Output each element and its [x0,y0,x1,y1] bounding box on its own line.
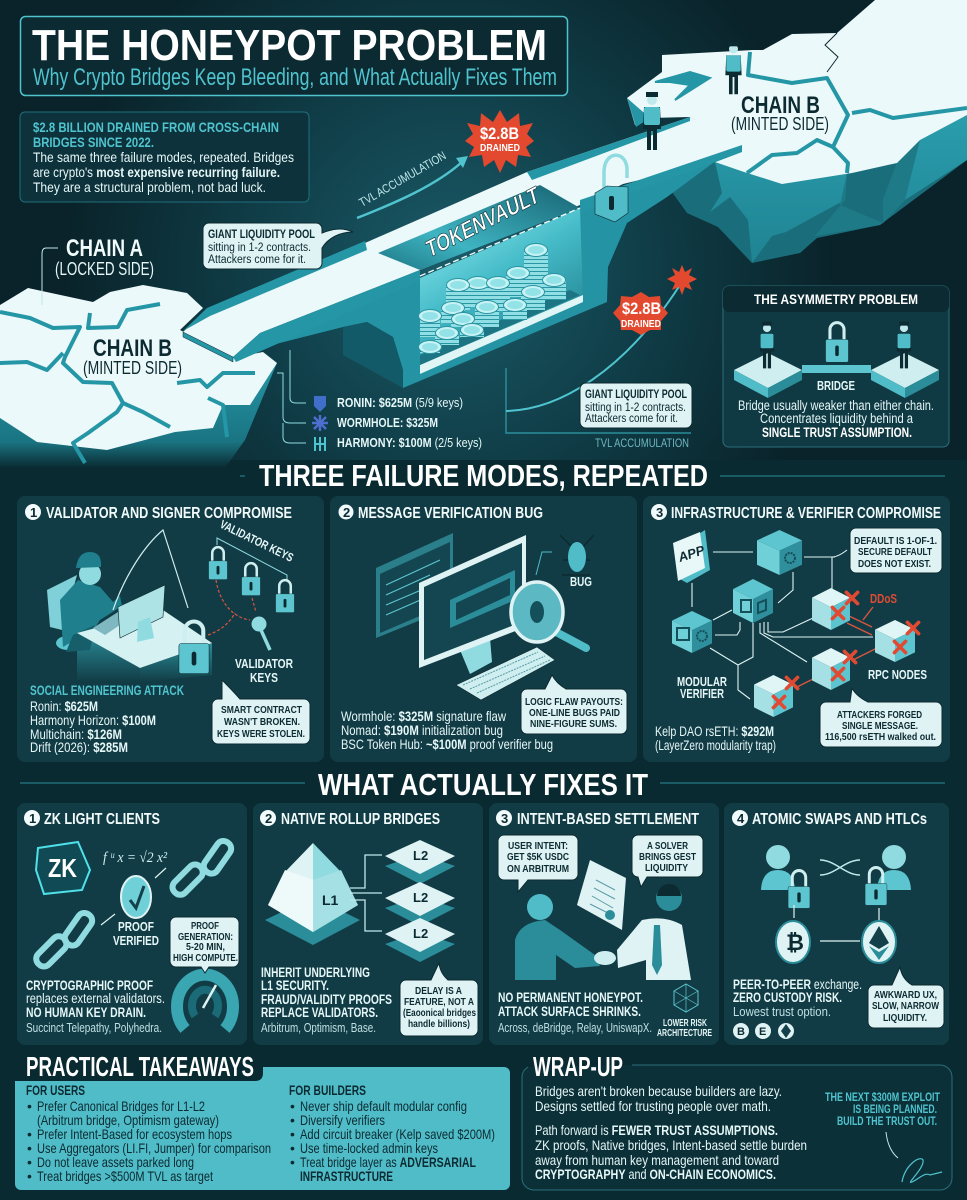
closing callout [825,1092,940,1158]
open padlock [595,155,628,222]
app block [673,530,710,583]
network diagram: VERIFIER [680,686,724,701]
label: chain b: (MINTED SIDE) [731,114,829,134]
bridge structure [183,117,742,388]
icon: zk chip [36,842,90,894]
burst small [667,265,697,295]
icon: lower risk architecture [657,984,712,1039]
wrap-up text [535,1083,807,1182]
gauge [177,975,233,1029]
panel: atomic swaps and htlcs [724,803,949,1045]
icons on cubes [677,553,795,641]
callout [212,680,310,744]
callout: user intent: USER INTENT: [508,840,568,852]
description: Across, deBridge, Relay, UniswapX. [498,1020,652,1035]
callout: solver: BRINGS GEST [639,851,696,863]
starburst: drained [465,110,534,173]
failed nodes [773,592,919,708]
callout: WASN'T BROKEN. [224,716,300,728]
panel: validator and signer compromise: 1 [30,505,37,520]
icon: ronin [314,396,326,412]
panel: asymmetry problem: Concentrates liquidity behind a [760,411,913,426]
callout: NINE-FIGURE SUMS. [530,718,617,730]
wrap-up text: Path forward is FEWER TRUST ASSUMPTIONS. [535,1122,778,1138]
description: Lowest trust option. [733,1004,831,1019]
list: for builders: Diversify verifiers [300,1112,385,1128]
panel: message verification bug: 2 [343,505,350,520]
token vault [378,181,583,374]
contract scroll [577,860,626,930]
callout: KEYS WERE STOLEN. [217,728,305,740]
callout: LOGIC FLAW PAYOUTS: [525,696,623,708]
list: for builders: Never ship default modular config [300,1098,467,1114]
signature [902,1159,942,1182]
broken bridge [802,365,871,373]
panel: message verification bug [330,496,637,762]
list: for users: (Arbitrum bridge, Optimism gateway) [37,1112,219,1128]
closing callout: IS BEING PLANNED. [853,1104,937,1116]
panel: native rollup bridges: 2 [265,811,272,826]
callout: default: SECURE DEFAULT [858,546,932,558]
description: L1 SECURITY. [261,978,329,993]
list: for users: Prefer Intent-Based for ecosystem hops [37,1126,232,1142]
label: chain b [83,335,182,378]
label: chain b: CHAIN B [741,92,820,119]
exploit list: BSC Token Hub: ~$100M proof verifier bug [341,736,553,752]
tvl arrow: TVL ACCUMULATION [356,148,448,210]
wrap-up text: CRYPTOGRAPHY and ON-CHAIN ECONOMICS. [535,1166,776,1182]
description: NO HUMAN KEY DRAIN. [26,1005,146,1020]
bridge wall [235,152,742,388]
list: for builders: • [290,1140,295,1156]
list: for users: • [27,1140,32,1156]
validator key locks [208,517,296,685]
callout: user intent: ON ARBITRUM [507,863,569,875]
description: ZERO CUSTODY RISK. [733,990,842,1005]
validator key locks: VALIDATOR [235,656,293,671]
list: for users: • [27,1098,32,1114]
panel: practical takeaways [10,1050,510,1190]
network diagram: DDoS [870,591,897,606]
attack list: SOCIAL ENGINEERING ATTACK [30,682,184,698]
list: for users: • [27,1168,32,1184]
chains and proof check: VERIFIED [113,933,159,948]
handshake illustration [515,860,691,980]
callout: attackers: ATTACKERS FORGED [837,709,922,721]
list: for builders: Add circuit breaker (Kelp saved $200M) [300,1126,495,1142]
description: FRAUD/VALIDITY PROOFS [261,992,392,1007]
description: Succinct Telepathy, Polyhedra. [26,1020,162,1035]
icon: zk chip: ZK [48,853,77,883]
heading: three failure modes: THREE FAILURE MODES, REPEATED [259,458,708,493]
closing callout: BUILD THE TRUST OUT. [837,1116,937,1128]
right platform [871,322,939,398]
panel: practical takeaways: PRACTICAL TAKEAWAYS [26,1051,254,1082]
label: chain a: (LOCKED SIDE) [55,259,154,279]
panel: infrastructure and verifier compromise: 3 [656,505,663,520]
callout: 5-20 MIN, [186,941,225,953]
list: for users: FOR USERS [26,1082,85,1098]
l2 stacks: L2 [413,890,428,905]
magnifying glass [511,582,586,648]
panel: validator and signer compromise [17,496,324,762]
intro box: The same three failure modes, repeated. Bridges [33,149,294,165]
panel: asymmetry problem [723,286,949,447]
intro box: They are a structural problem, not bad luck. [33,179,266,195]
exploit note: (LayerZero modularity trap) [655,737,776,753]
starburst: drained: $2.8B [480,124,519,143]
code window and monitor [376,533,555,700]
attack list: Multichain: $126M [30,726,122,742]
panel: asymmetry problem: SINGLE TRUST ASSUMPTION. [762,425,912,440]
label: chain a: CHAIN A [66,235,143,262]
panel: asymmetry problem: BRIDGE [817,379,855,393]
description [261,965,392,1035]
small coin icons: B [737,1026,745,1038]
panel: intent-based settlement [489,803,719,1045]
label: chain b: CHAIN B [93,335,172,362]
list: for builders: • [290,1098,295,1114]
burst: drained [613,292,668,335]
callout: attackers: SINGLE MESSAGE. [842,720,918,732]
guards on chain b [643,42,742,150]
icon: lock [826,323,848,362]
exploit list: RONIN: $625M (5/9 keys) [337,396,463,410]
l2 stacks: L2 [413,926,428,941]
iceberg: chain a left [0,285,277,468]
icon: ethereum [862,921,896,963]
description [498,990,652,1035]
intro box [20,112,309,202]
callout: DELAY IS A [415,985,462,997]
list: for builders: • [290,1112,295,1128]
attack list: Drift (2026): $285M [30,739,128,755]
exploit list [341,708,553,752]
validator key locks: KEYS [250,670,278,685]
callout: (Eaoonical bridges [403,1007,476,1019]
panel: asymmetry problem: THE ASYMMETRY PROBLEM [754,291,918,307]
list: for builders: • [290,1126,295,1142]
description: replaces external validators. [26,991,165,1006]
list: for users: Prefer Canonical Bridges for L1-L2 [37,1098,205,1114]
callout: PROOF [191,920,219,932]
exploit list: HARMONY: $100M (2/5 keys) [337,436,482,450]
panel: validator and signer compromise: VALIDATOR AND SIGNER COMPROMISE [46,505,292,522]
callout: liquidity pool: Attackers come for it. [585,413,678,425]
attack list: Ronin: $625M [30,698,98,714]
icon: harmony [315,437,325,451]
callout: AWKWARD UX, [874,989,937,1001]
callout: default [850,528,942,573]
description: Arbitrum, Optimism, Base. [261,1020,376,1035]
formula: f ᵘ x = √2 x² [103,850,167,866]
callout: LIQUIDITY. [883,1012,927,1024]
callout [868,967,944,1028]
callout: solver: A SOLVER [647,840,688,852]
chains and proof check: PROOF [118,919,154,934]
bridge deck [183,117,742,357]
icon: bug [536,535,594,589]
vault label: TOKENVAULT [424,181,542,263]
validator key locks: VALIDATOR KEYS [218,517,296,565]
network diagram: MODULAR [677,674,727,689]
title: Why Crypto Bridges Keep Bleeding, and What Actually Fixes Them [33,64,557,91]
burst: drained: $2.8B [622,299,661,318]
exploit note: Kelp DAO rsETH: $292M [655,723,774,739]
panel: wrap-up: WRAP-UP [533,1051,623,1082]
panel: infrastructure and verifier compromise [643,496,950,762]
list: for builders: INFRASTRUCTURE [300,1168,393,1184]
callout: attackers: 116,500 rsETH walked out. [825,731,936,743]
panel: atomic swaps and htlcs: 4 [737,811,745,826]
description: INHERIT UNDERLYING [261,965,370,980]
callout: HIGH COMPUTE. [173,952,238,964]
description: NO PERMANENT HONEYPOT. [498,990,643,1005]
network diagram [672,530,927,717]
panel: intent-based settlement: 3 [501,811,508,826]
callout: SLOW, NARROW [872,1000,939,1012]
intro box: $2.8 BILLION DRAINED FROM CROSS-CHAIN [33,119,279,135]
wrap-up text: away from human key management and toward [535,1152,779,1168]
small coin icons: E [759,1026,766,1038]
icon: bitcoin [776,921,810,963]
coins [418,244,566,354]
tvl mini chart [506,265,697,450]
callout: user intent [498,835,578,892]
intro box: BRIDGES SINCE 2022. [33,134,154,150]
exploit list: Nomad: $190M initialization bug [341,722,503,738]
panel: zk light clients: ZK LIGHT CLIENTS [44,811,160,828]
list: for builders: Treat bridge layer as ADVERSARIAL [300,1154,476,1170]
callout: giant liquidity pool: Attackers come for it. [208,254,306,266]
label: chain b: (MINTED SIDE) [83,358,182,378]
list: for users: Treat bridges >$500M TVL as target [37,1168,213,1184]
list: for users: • [27,1126,32,1142]
icon: lower risk architecture: ARCHITECTURE [657,1028,712,1039]
swap diagram [761,845,911,963]
wrap-up text: Designs settled for trusting people over math. [535,1098,771,1114]
panel: native rollup bridges: NATIVE ROLLUP BRIDGES [281,811,440,828]
title [20,16,568,96]
panel: intent-based settlement: INTENT-BASED SETTLEMENT [517,811,699,828]
label: chain b [731,92,829,134]
list: for users [26,1082,271,1184]
tvl mini chart: TVL ACCUMULATION [595,438,689,450]
exploit note [655,723,776,753]
label: chain a [42,235,154,305]
list: for builders [289,1082,495,1184]
description: REPLACE VALIDATORS. [261,1005,378,1020]
l2 stacks [350,840,455,962]
list: for builders: • [290,1154,295,1170]
callout: default: DOES NOT EXIST. [858,558,931,570]
l1 pyramid: L1 [322,892,339,908]
icon: lower risk architecture: LOWER RISK [663,1018,708,1029]
callout: liquidity pool [580,383,692,428]
panel: zk light clients [17,803,247,1045]
callout: SMART CONTRACT [221,704,302,716]
attack list [30,682,184,755]
starburst: drained: DRAINED [480,142,520,154]
chains and proof check [33,838,234,969]
panel: message verification bug: MESSAGE VERIFICATION BUG [358,505,543,522]
title: THE HONEYPOT PROBLEM [32,21,547,70]
exploit list [277,350,482,451]
panel: wrap-up [522,1051,952,1190]
callout: giant liquidity pool: GIANT LIQUIDITY POOL [208,229,315,241]
l2 stacks: L2 [413,848,428,863]
description [26,978,165,1035]
l1 pyramid [265,843,360,945]
exploit list: Wormhole: $325M signature flaw [341,708,507,724]
callout: liquidity pool: GIANT LIQUIDITY POOL [585,389,687,401]
heading: what actually fixes it: WHAT ACTUALLY FIXES IT [318,767,648,802]
list: for users: • [27,1154,32,1170]
callout: solver [632,835,703,887]
burst: drained: DRAINED [621,318,661,330]
list: for builders: Use time-locked admin keys [300,1140,438,1156]
wrap-up text: ZK proofs, Native bridges, Intent-based settle burden [535,1137,807,1153]
callout: solver: LIQUIDITY [645,862,688,874]
description: CRYPTOGRAPHIC PROOF [26,978,153,993]
callout: liquidity pool: sitting in 1-2 contracts. [585,402,686,414]
list: for builders: FOR BUILDERS [289,1082,366,1098]
callout: giant liquidity pool [203,223,353,269]
description [733,977,862,1019]
intro box: are crypto's most expensive recurring failure. [33,164,280,180]
callout: user intent: GET $5K USDC [507,851,569,863]
callout: handle billions) [408,1018,470,1030]
callout [400,963,478,1036]
list: for users: Use Aggregators (LI.FI, Jumper) for comparison [37,1140,271,1156]
callout: giant liquidity pool: sitting in 1-2 contracts. [208,242,311,254]
list: for users: Do not leave assets parked long [37,1154,194,1170]
description: PEER-TO-PEER exchange. [733,977,862,992]
left platform [734,322,802,398]
wrap-up text: Bridges aren't broken because builders are lazy. [535,1083,782,1099]
panel: atomic swaps and htlcs: ATOMIC SWAPS AND HTLCs [752,811,927,828]
callout: attackers [820,688,942,747]
panel: zk light clients: 1 [29,811,36,826]
callout: ONE-LINE BUGS PAID [529,707,620,719]
callout: FEATURE, NOT A [404,996,474,1008]
callout [521,675,627,734]
attack list: Harmony Horizon: $100M [30,712,156,728]
iceberg: chain b top right [627,0,967,263]
app block: APP [675,542,707,565]
small coin icons [733,1023,794,1039]
callout: GENERATION: [178,931,233,943]
description: ATTACK SURFACE SHRINKS. [498,1004,641,1019]
icon: wormhole [312,415,328,431]
icon: bitcoin: ₿ [786,930,804,955]
callout [170,917,239,973]
callout: default: DEFAULT IS 1-OF-1. [854,535,937,547]
hacker at desk illustration [47,530,212,682]
panel: native rollup bridges [253,803,483,1045]
exploit list: WORMHOLE: $325M [337,416,438,430]
icon: bug: BUG [570,575,592,589]
network diagram: RPC NODES [868,667,927,682]
